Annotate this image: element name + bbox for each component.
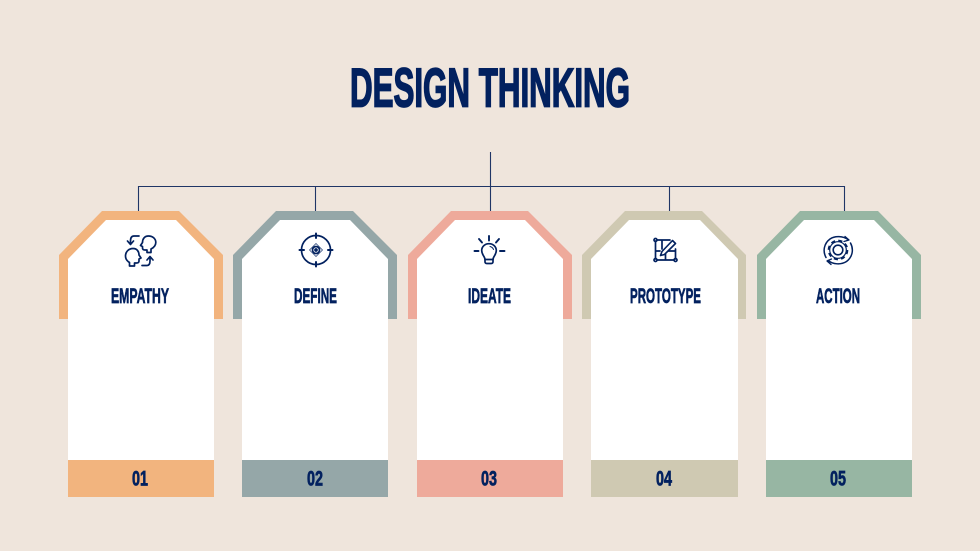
card frame — [757, 211, 921, 319]
panel: prototype — [582, 211, 746, 497]
panel: empathy — [59, 211, 223, 497]
number bar — [591, 460, 738, 497]
card body — [68, 220, 214, 460]
number bar — [68, 460, 214, 497]
number bar — [242, 460, 388, 497]
icon: grid and pencil — [654, 238, 677, 262]
card body — [417, 220, 563, 460]
card frame — [408, 211, 572, 319]
panel: define — [233, 211, 397, 497]
card body — [591, 220, 738, 460]
card body — [242, 220, 388, 460]
number bar — [417, 460, 563, 497]
heading: IDEATE — [468, 285, 511, 308]
card frame — [233, 211, 397, 319]
icon: two heads with arrows — [126, 236, 156, 266]
card body — [766, 220, 912, 460]
card frame — [582, 211, 746, 319]
number: 05 — [830, 468, 846, 490]
heading: ACTION — [816, 285, 860, 308]
number: 02 — [307, 468, 323, 490]
number: 03 — [481, 468, 497, 490]
icon: gear with cycle arrows — [824, 236, 852, 264]
heading: EMPATHY — [111, 285, 169, 308]
number: 04 — [656, 468, 672, 490]
icon: light bulb — [474, 236, 504, 264]
heading: PROTOTYPE — [630, 285, 701, 308]
card frame — [59, 211, 223, 319]
title: DESIGN THINKING — [350, 56, 630, 118]
number: 01 — [132, 468, 148, 490]
icon: target — [300, 234, 332, 266]
connector lines — [138, 152, 844, 211]
heading: DEFINE — [294, 285, 337, 308]
panel: ideate — [408, 211, 572, 497]
panel: action — [757, 211, 921, 497]
number bar — [766, 460, 912, 497]
